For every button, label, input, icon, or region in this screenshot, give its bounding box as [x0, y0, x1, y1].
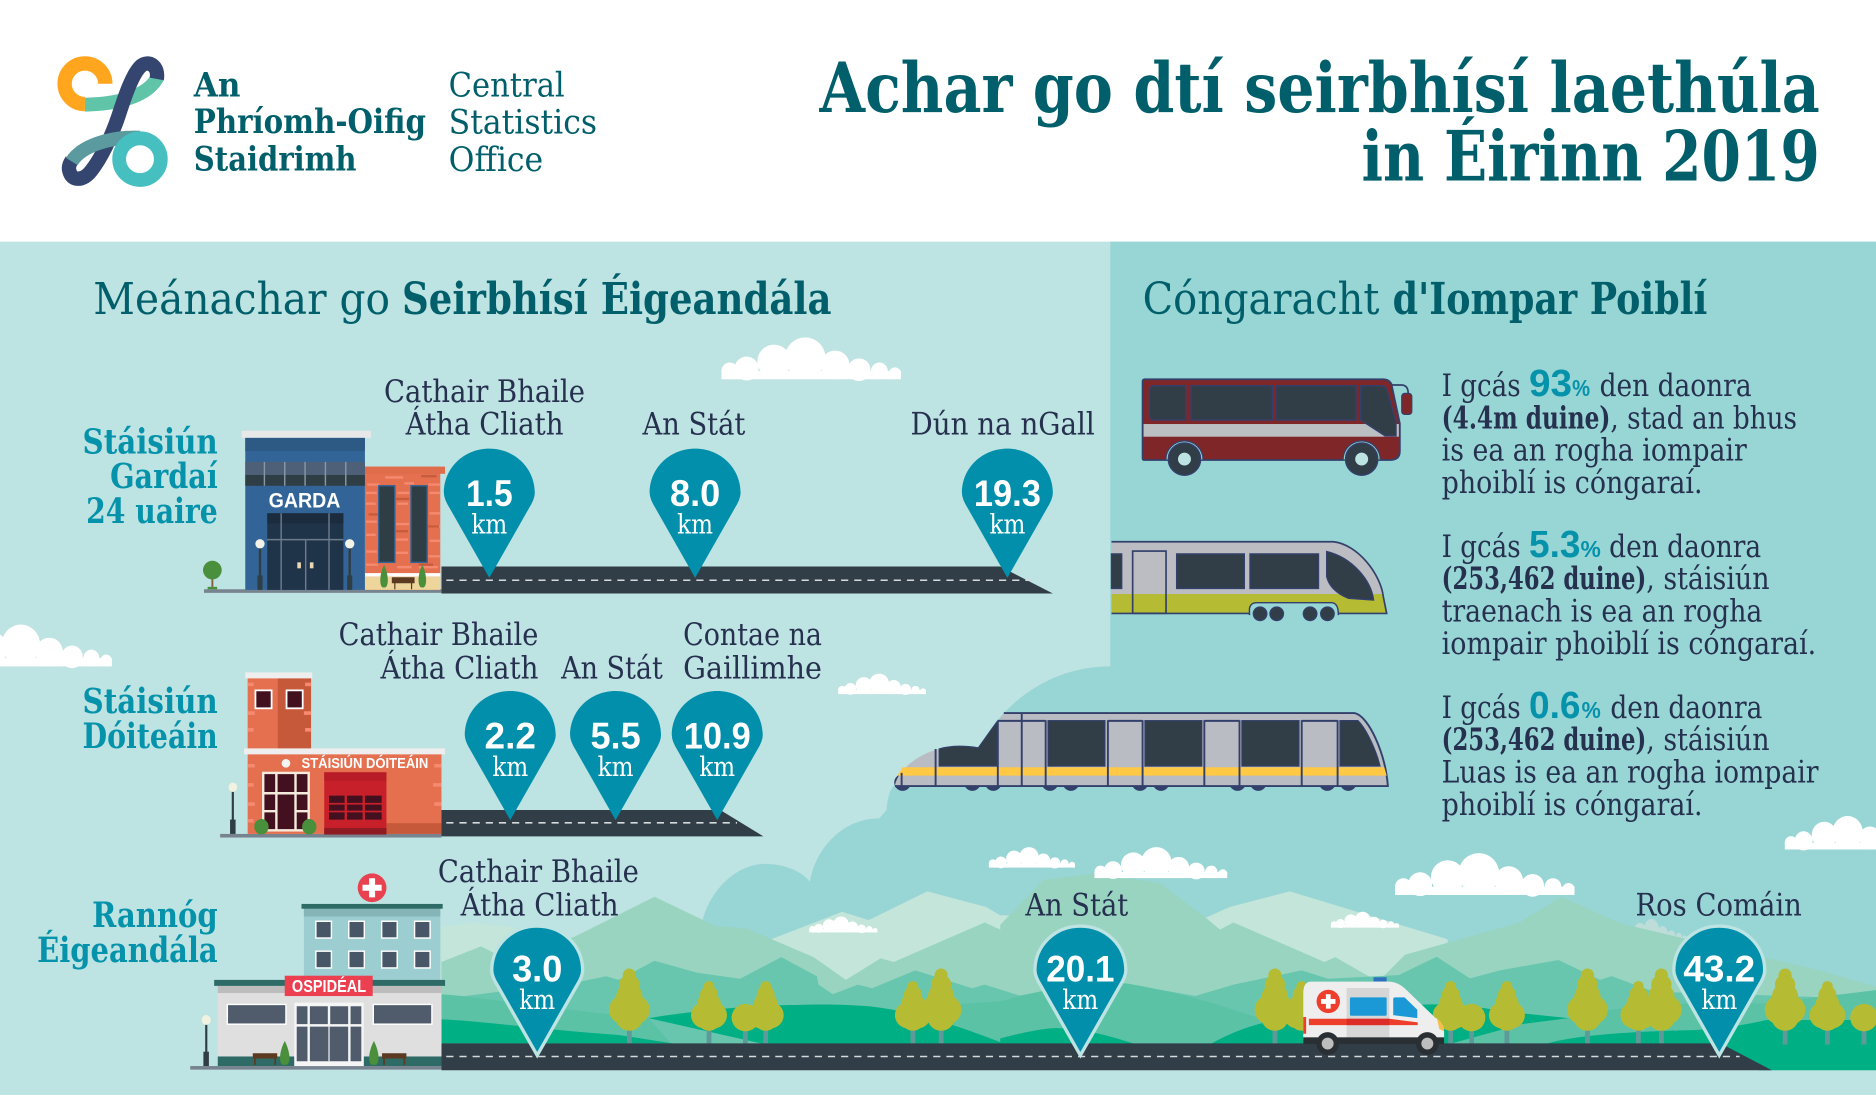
pin: Garda State 8.0 km: [650, 449, 741, 578]
panel: light background: [0, 242, 1876, 1095]
small trees: [280, 1041, 379, 1065]
section label: Garda stations: Stáisiún: [83, 421, 218, 462]
pin: Garda Dublin 1.5 km: [444, 449, 535, 578]
place labels row 3: Ros Comáin: [1636, 887, 1802, 923]
wheels: [894, 774, 1357, 791]
sign: OSPIDÉAL: OSPIDÉAL: [292, 976, 366, 996]
text block: Luas: (253,462 duine): [1442, 722, 1646, 758]
body: [895, 713, 1388, 785]
heading: emergency services: Seirbhísí Éigeandála: [402, 274, 832, 325]
pin: A&E State 20.1 km: 20.1: [1046, 948, 1114, 990]
text block: bus: phoiblí is cóngaraí.: [1442, 466, 1703, 501]
cross: [1317, 990, 1340, 1013]
logo mark: [65, 63, 161, 180]
place labels row 2: Átha Cliath: [380, 648, 538, 686]
cloud: [838, 674, 926, 695]
logo text: Irish: Phríomh-Oifig: [194, 102, 426, 141]
place labels row 2: Cathair Bhaile: [339, 617, 538, 653]
section label: emergency department: Éigeandála: [37, 929, 218, 971]
pin: Garda Donegal 19.3 km: km: [989, 509, 1025, 541]
rolling hills: [441, 983, 1876, 1045]
lamp post: [202, 1015, 211, 1066]
main building: [244, 748, 445, 835]
stat: 0.6%: %: [1582, 697, 1601, 723]
icon: bus: [1143, 379, 1412, 475]
near mountains: [441, 957, 1876, 1045]
text block: bus: [1442, 362, 1797, 501]
benches: [254, 1054, 406, 1065]
wheels: [1316, 1032, 1339, 1055]
text block: bus: is ea an rogha iompair: [1442, 434, 1747, 469]
siren: [1374, 977, 1387, 981]
tower: [245, 672, 312, 749]
place labels row 3: Cathair Bhaile: [438, 854, 639, 890]
place labels row 1: An Stát: [642, 406, 746, 442]
stat: 5.3%: 5.3: [1529, 523, 1580, 566]
body: [1303, 982, 1444, 1040]
text block: train: , stáisiún: [1646, 562, 1770, 597]
pin: fire Galway 10.9 km: [672, 691, 763, 820]
text block: Luas: phoiblí is cóngaraí.: [1442, 788, 1703, 823]
mid mountains: [441, 873, 1876, 1045]
door lines: [902, 713, 1338, 786]
text block: Luas: [1442, 684, 1819, 823]
pin: A&E State 20.1 km: [1035, 926, 1126, 1055]
outline: [1111, 542, 1387, 613]
logo text: English: [449, 65, 597, 180]
wheels: [1166, 441, 1380, 459]
stat: 93%: %: [1572, 375, 1590, 401]
road 2: [441, 810, 763, 836]
pin: Garda State 8.0 km: km: [677, 509, 713, 541]
ground floor: [214, 980, 445, 1066]
light mountains: [441, 891, 1448, 1045]
tree foliage: [609, 969, 1876, 1031]
body: [1111, 542, 1387, 613]
garage door: [324, 772, 386, 835]
place labels row 1: Dún na nGall: [910, 406, 1095, 442]
logo text: English: Central: [449, 65, 565, 105]
pin: fire Dublin 2.2 km: km: [492, 751, 528, 783]
place labels row 2: An Stát: [560, 650, 663, 686]
mirror: [1390, 385, 1408, 394]
pin: fire State 5.5 km: km: [598, 751, 634, 783]
place labels row 1: [384, 374, 1095, 442]
cloud: [1331, 912, 1399, 928]
pin: A&E Dublin 3.0 km: 3.0: [512, 948, 562, 990]
text block: bus: den daonra: [1600, 369, 1752, 404]
blue building: [242, 431, 371, 590]
pin: Garda Donegal 19.3 km: [962, 449, 1053, 578]
pin: Garda Dublin 1.5 km: km: [471, 509, 507, 541]
headlight: [1437, 1018, 1444, 1031]
upper storey: [302, 904, 443, 980]
icon: red cross sign: [358, 873, 386, 902]
foreground green: [441, 1004, 1876, 1070]
section label: Garda stations: [83, 421, 218, 532]
section label: fire stations: Stáisiún: [83, 681, 218, 722]
pin: Garda State 8.0 km: 8.0: [670, 472, 720, 514]
ground: [220, 834, 441, 838]
windows: [1350, 997, 1387, 1016]
section label: fire stations: Dóiteáin: [83, 716, 218, 757]
text block: Luas: I gcás: [1442, 691, 1521, 726]
wheels: [1253, 607, 1334, 620]
title: [819, 48, 1820, 198]
pin: A&E Roscommon 43.2 km: km: [1701, 984, 1737, 1016]
lamp post: [229, 782, 237, 834]
road 3: [441, 1043, 1772, 1070]
text block: train: (253,462 duine): [1442, 561, 1646, 597]
door: [1133, 551, 1166, 613]
icon: Luas tram: [894, 713, 1388, 791]
lime lower band: [1111, 594, 1387, 613]
pin: fire Galway 10.9 km: km: [699, 751, 735, 783]
place labels row 3: [438, 854, 1802, 923]
text block: bus: , stad an bhus: [1610, 401, 1797, 436]
small tree: [203, 561, 222, 589]
cloud: [989, 847, 1075, 868]
door window: [262, 772, 310, 832]
bushes: [254, 819, 269, 835]
section label: fire stations: [83, 681, 218, 757]
place labels row 3: An Stát: [1024, 887, 1129, 923]
section label: emergency department: [37, 895, 218, 971]
text block: train: iompair phoiblí is cóngaraí.: [1442, 627, 1816, 662]
heading: emergency services: [93, 274, 832, 325]
header: logo: [65, 63, 597, 180]
illustration: fire station: [220, 672, 445, 838]
body: [1143, 379, 1400, 460]
illustration: Garda station: [203, 431, 445, 593]
stat: 93%: 93: [1529, 362, 1572, 405]
text block: train: den daonra: [1609, 530, 1761, 565]
clouds: [0, 337, 1876, 851]
door: [294, 1003, 364, 1066]
place labels row 2: [339, 617, 822, 686]
sign: fire station: STÁISIÚN DÓITEÁIN: [302, 754, 428, 772]
ground: [204, 589, 441, 593]
red stripe: [1309, 1019, 1418, 1025]
logo text: English: Office: [449, 140, 543, 180]
text block: train: traenach is ea an rogha: [1442, 595, 1762, 630]
stat: 93%: [1529, 362, 1590, 405]
cloud: [721, 337, 901, 381]
section label: emergency department: Rannóg: [92, 895, 218, 936]
heading: emergency services: Meánachar go: [93, 274, 390, 325]
heading: public transport: Cóngaracht: [1143, 274, 1380, 325]
place labels row 1: Átha Cliath: [405, 404, 564, 442]
underside: [1303, 1037, 1444, 1044]
place labels row 1: Cathair Bhaile: [384, 374, 585, 410]
ground: [190, 1066, 441, 1070]
pin: fire Dublin 2.2 km: 2.2: [485, 714, 536, 756]
text block: Luas: , stáisiún: [1646, 723, 1770, 758]
icon: train: [1111, 542, 1387, 620]
clouds over the mountains: [809, 847, 1574, 933]
bogie: [1249, 603, 1338, 614]
cloud: [1785, 816, 1876, 851]
door: [267, 513, 343, 590]
cloud: [1395, 853, 1574, 897]
text block: bus: (4.4m duine): [1442, 400, 1610, 436]
pin: fire State 5.5 km: [570, 691, 661, 820]
sign: GARDA: GARDA: [269, 488, 340, 512]
heading: public transport: d'Iompar Poiblí: [1393, 274, 1708, 325]
pin: Garda Donegal 19.3 km: 19.3: [974, 472, 1041, 514]
text block: bus: I gcás: [1442, 369, 1521, 404]
logo text: Irish: An: [193, 65, 240, 104]
landscape: mountains and hills: [441, 873, 1876, 1070]
pin: fire Galway 10.9 km: 10.9: [684, 714, 751, 756]
trees along the road: [609, 969, 1876, 1045]
text block: train: I gcás: [1442, 530, 1521, 565]
pin: fire Dublin 2.2 km: [465, 691, 556, 820]
pin: A&E Roscommon 43.2 km: 43.2: [1683, 948, 1755, 990]
text block: train: [1442, 523, 1816, 662]
cloud: [0, 625, 112, 668]
pin: fire State 5.5 km: 5.5: [590, 714, 641, 756]
stat: 0.6%: 0.6: [1529, 684, 1580, 727]
pin: A&E Roscommon 43.2 km: [1674, 926, 1765, 1055]
windows: [939, 721, 1380, 766]
tree trunks: [627, 1027, 1866, 1045]
icon: ambulance: [1303, 977, 1444, 1055]
stat: 5.3%: %: [1580, 536, 1601, 562]
place labels row 3: Átha Cliath: [460, 885, 619, 923]
logo text: Irish: Staidrimh: [194, 139, 357, 178]
cloud: [1094, 847, 1227, 879]
windows: [1111, 552, 1374, 600]
section label: Garda stations: Gardaí: [110, 456, 218, 497]
section label: Garda stations: 24 uaire: [86, 491, 218, 532]
lamps: [255, 539, 354, 590]
brick building: [365, 467, 445, 590]
pin: A&E Dublin 3.0 km: km: [519, 984, 555, 1016]
panel: public transport darker background: [700, 242, 1876, 1045]
heading: public transport: [1143, 274, 1708, 325]
logo text: English: Statistics: [449, 102, 597, 142]
stripe: [1144, 424, 1399, 437]
pin: Garda Dublin 1.5 km: 1.5: [466, 472, 513, 514]
place labels row 2: Contae na: [683, 617, 822, 653]
pin: A&E Dublin 3.0 km: [492, 926, 583, 1055]
cloud: [809, 916, 877, 933]
illustration: hospital: [190, 873, 445, 1070]
place labels row 2: Gaillimhe: [683, 650, 822, 686]
road 1: [441, 567, 1053, 593]
logo text: Irish: [193, 65, 426, 178]
text block: Luas: den daonra: [1610, 691, 1762, 726]
yellow stripe: [897, 767, 1387, 776]
pin: A&E State 20.1 km: km: [1062, 984, 1098, 1016]
faded cloud behind mountain: [1620, 919, 1687, 943]
windows: [1149, 386, 1396, 436]
text block: Luas: Luas is ea an rogha iompair: [1442, 755, 1819, 790]
